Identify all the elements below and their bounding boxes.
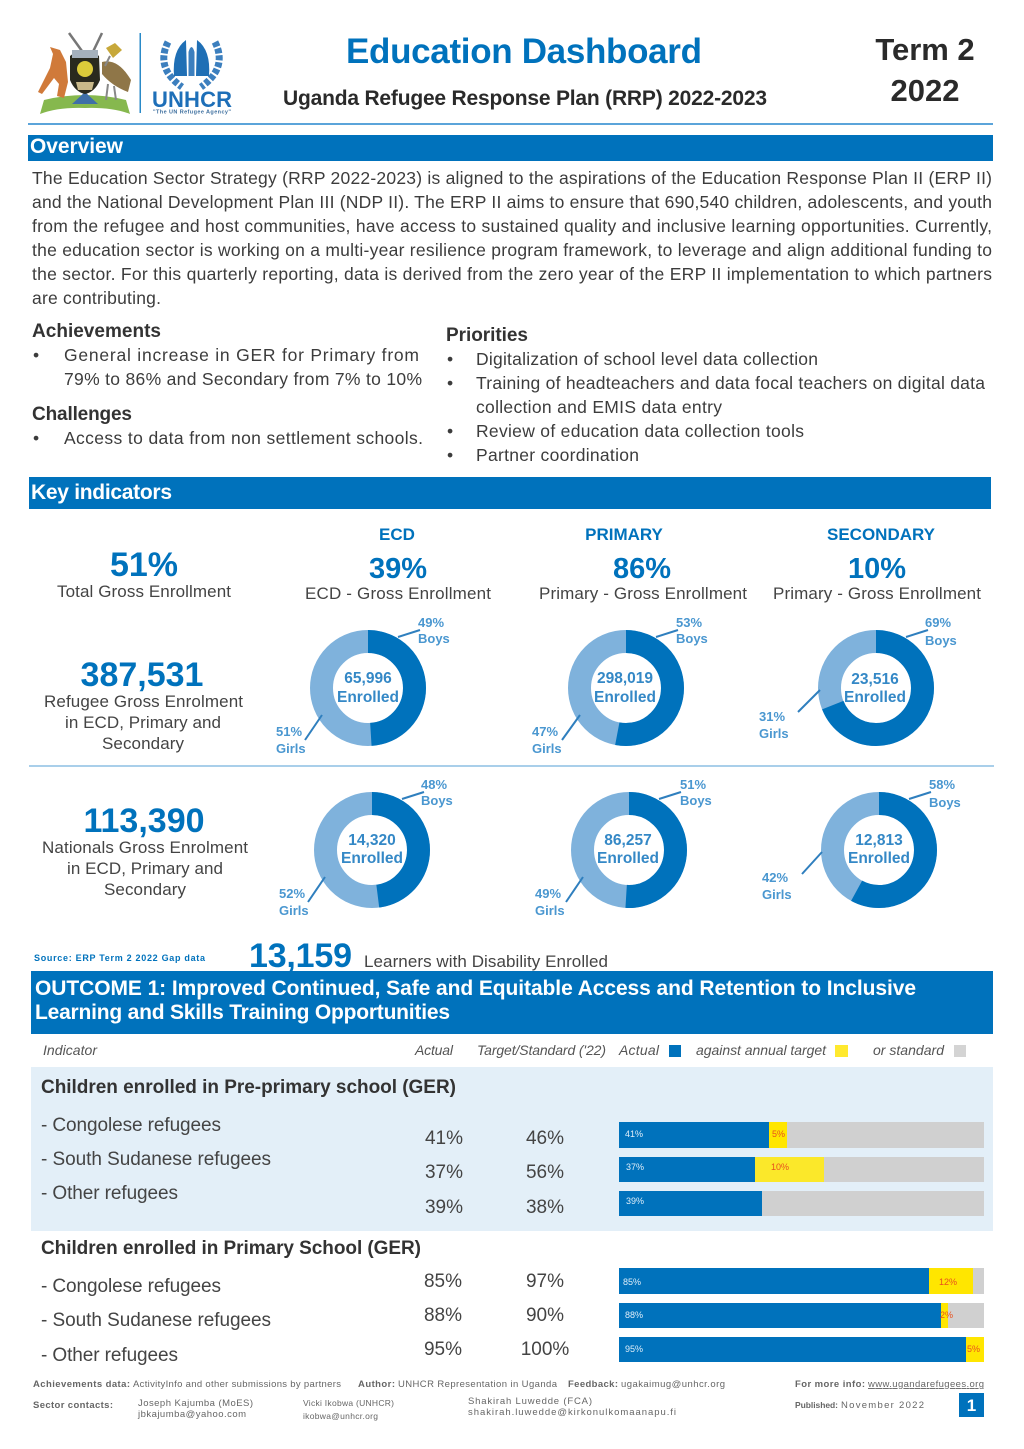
actual and target values: 97% bbox=[526, 1271, 564, 1292]
term label: Term 2 bbox=[875, 32, 975, 67]
donut chart: nationals secondary bbox=[762, 777, 961, 902]
donut chart: refugee primary: 298,019 bbox=[597, 670, 653, 687]
title: Education Dashboard bbox=[346, 32, 702, 71]
bar: other refugees pre-primary: 39% bbox=[626, 1196, 644, 1206]
achievements: 79% to 86% and Secondary from 7% to 10% bbox=[64, 369, 422, 389]
priorities: • bbox=[447, 373, 453, 393]
donut chart: nationals secondary: 58% bbox=[929, 777, 955, 792]
donut chart: refugee secondary: 69% bbox=[925, 615, 951, 630]
stat: nationals gross enrolment: Nationals Gross Enrolment bbox=[42, 838, 248, 857]
page number bbox=[959, 1393, 984, 1417]
header bbox=[38, 32, 975, 116]
stat: learners with disability bbox=[249, 937, 608, 975]
actual and target values: 85% bbox=[424, 1271, 462, 1292]
donut chart: nationals ECD: 14,320 bbox=[348, 832, 396, 849]
stat: ECD enrollment bbox=[305, 553, 491, 603]
overview text block: are contributing. bbox=[32, 288, 161, 308]
stat: ECD enrollment: 39% bbox=[369, 553, 427, 585]
priorities: Priorities bbox=[446, 325, 528, 346]
row labels: - Other refugees bbox=[41, 1183, 178, 1204]
donut chart: nationals ECD: Enrolled bbox=[341, 850, 403, 867]
heading: overview: Overview bbox=[30, 135, 124, 158]
bar: Congolese primary: 12% bbox=[939, 1277, 957, 1287]
donut chart: nationals ECD bbox=[279, 777, 453, 918]
donut chart: refugee primary: Girls bbox=[532, 741, 562, 756]
subtitle: Uganda Refugee Response Plan (RRP) 2022-2023 bbox=[283, 87, 767, 110]
icon: UNHCR logo: UNHCR bbox=[152, 87, 232, 112]
source note: Source: ERP Term 2 2022 Gap data bbox=[34, 953, 206, 963]
stat: nationals gross enrolment bbox=[42, 802, 248, 899]
page number: 1 bbox=[967, 1396, 976, 1415]
sector contacts: Joseph Kajumba (MoES) bbox=[138, 1398, 253, 1409]
column heading: primary: PRIMARY bbox=[585, 525, 664, 544]
donut chart: nationals primary: 49% bbox=[535, 886, 561, 901]
divider: logo separator bbox=[140, 33, 141, 113]
actual and target values: 37% bbox=[425, 1162, 463, 1183]
row labels bbox=[41, 1276, 271, 1366]
overview text block: the sector. For this quarterly reporting, data is derived from the zero year of the ERP II implementation to which partners bbox=[32, 264, 992, 284]
panel: key indicators bbox=[29, 477, 994, 975]
stat: ECD enrollment: ECD - Gross Enrollment bbox=[305, 584, 491, 603]
donut chart: refugee ECD: 49% bbox=[418, 615, 444, 630]
table header and legend: or standard bbox=[873, 1042, 945, 1058]
donut chart: refugee primary: 53% bbox=[676, 615, 702, 630]
priorities: • bbox=[447, 445, 453, 465]
stat: secondary enrollment: 10% bbox=[848, 553, 906, 585]
stat: secondary enrollment: Primary - Gross Enrollment bbox=[773, 584, 981, 603]
challenges bbox=[32, 404, 423, 448]
donut chart: nationals secondary: 42% bbox=[762, 870, 788, 885]
achievements: • bbox=[33, 345, 39, 365]
stat: total gross enrollment bbox=[57, 546, 231, 601]
panel: outcome 1 bbox=[31, 971, 993, 1366]
bar: other refugees pre-primary bbox=[619, 1191, 984, 1216]
actual and target values: 38% bbox=[526, 1197, 564, 1218]
donut chart: refugee secondary: 23,516 bbox=[851, 671, 899, 688]
sector contacts: shakirah.luwedde@kirkonulkomaanapu.fi bbox=[468, 1407, 676, 1418]
bar: Congolese pre-primary: 41% bbox=[625, 1129, 643, 1139]
donut chart: refugee ECD: 65,996 bbox=[344, 670, 392, 687]
donut chart: refugee primary: Boys bbox=[676, 631, 708, 646]
stat: primary enrollment bbox=[539, 553, 747, 603]
donut chart: refugee secondary: 31% bbox=[759, 709, 785, 724]
table header and legend bbox=[43, 1042, 966, 1058]
donut chart: refugee secondary bbox=[759, 615, 957, 741]
column heading: secondary: SECONDARY bbox=[827, 525, 936, 544]
table header and legend: Actual bbox=[618, 1042, 660, 1058]
actual and target values: 46% bbox=[526, 1128, 564, 1149]
heading: key indicators bbox=[29, 477, 991, 509]
published date: Published: bbox=[795, 1400, 838, 1410]
donut chart: refugee primary: Enrolled bbox=[594, 689, 656, 706]
term label bbox=[875, 32, 975, 108]
heading: overview bbox=[28, 135, 993, 161]
overview text block bbox=[32, 168, 992, 308]
table header and legend: against annual target bbox=[696, 1042, 827, 1058]
panel: pre-primary enrolment bbox=[31, 1067, 993, 1231]
term label: 2022 bbox=[891, 73, 959, 108]
data credits: www.ugandarefugees.org bbox=[867, 1379, 984, 1390]
donut chart: nationals secondary: Girls bbox=[762, 887, 792, 902]
sector contacts: ikobwa@unhcr.org bbox=[303, 1411, 378, 1421]
overview text block: the education sector is working on a multi-year resilience program framework, to leverage and align additional funding to bbox=[32, 240, 992, 260]
stat: nationals gross enrolment: in ECD, Primary and bbox=[67, 859, 223, 878]
donut chart: nationals primary: Boys bbox=[680, 793, 712, 808]
priorities bbox=[446, 325, 985, 465]
donut chart: refugee ECD: 51% bbox=[276, 724, 302, 739]
achievements bbox=[32, 321, 422, 389]
priorities: collection and EMIS data entry bbox=[476, 397, 722, 417]
donut chart: nationals primary: Enrolled bbox=[597, 850, 659, 867]
footer bbox=[33, 1379, 984, 1421]
priorities: Digitalization of school level data collection bbox=[476, 349, 818, 369]
donut chart: refugee ECD: Girls bbox=[276, 741, 306, 756]
data credits bbox=[33, 1379, 984, 1390]
sector contacts bbox=[33, 1396, 676, 1421]
table header and legend: Actual bbox=[414, 1042, 454, 1058]
bar: other refugees primary: 5% bbox=[967, 1344, 980, 1354]
sector contacts: Sector contacts: bbox=[33, 1400, 113, 1411]
achievements: General increase in GER for Primary from bbox=[64, 345, 419, 365]
data credits: Feedback: bbox=[568, 1379, 618, 1390]
priorities: Training of headteachers and data focal teachers on digital data bbox=[476, 373, 985, 393]
bar: South Sudanese pre-primary bbox=[619, 1157, 984, 1182]
overview text block: The Education Sector Strategy (RRP 2022-2023) is aligned to the aspirations of the Education Response Plan II (ERP II) bbox=[32, 168, 992, 188]
donut chart: nationals primary bbox=[535, 777, 712, 918]
donut chart: nationals ECD: Girls bbox=[279, 903, 309, 918]
donut chart: nationals ECD: Boys bbox=[421, 793, 453, 808]
donut chart: refugee primary bbox=[532, 615, 708, 756]
row labels: - Congolese refugees bbox=[41, 1115, 221, 1136]
heading: outcome 1: OUTCOME 1: Improved Continued, Safe and Equitable Access and Retention to Inclusive bbox=[35, 977, 916, 1000]
donut chart: nationals primary: 86,257 bbox=[604, 832, 652, 849]
stat: refugee gross enrolment: in ECD, Primary and bbox=[65, 713, 221, 732]
heading: primary: Children enrolled in Primary School (GER) bbox=[41, 1238, 421, 1259]
donut chart: refugee secondary: Boys bbox=[925, 633, 957, 648]
stat: primary enrollment: Primary - Gross Enrollment bbox=[539, 584, 747, 603]
bar: other refugees primary: 95% bbox=[625, 1344, 643, 1354]
row labels: - Congolese refugees bbox=[41, 1276, 221, 1297]
donut chart: refugee secondary: Girls bbox=[759, 726, 789, 741]
stat: refugee gross enrolment bbox=[44, 656, 243, 753]
donut chart: nationals ECD: 52% bbox=[279, 886, 305, 901]
row labels: - Other refugees bbox=[41, 1345, 178, 1366]
bar: South Sudanese pre-primary: 37% bbox=[626, 1162, 644, 1172]
donut chart: refugee secondary: Enrolled bbox=[844, 689, 906, 706]
heading: pre-primary: Children enrolled in Pre-primary school (GER) bbox=[41, 1077, 456, 1098]
table header and legend: Target/Standard ('22) bbox=[477, 1042, 606, 1058]
bar: Congolese pre-primary bbox=[619, 1122, 984, 1148]
donut chart: nationals ECD: 48% bbox=[421, 777, 447, 792]
actual and target values: 88% bbox=[424, 1305, 462, 1326]
row labels bbox=[41, 1115, 271, 1204]
bar: Congolese primary: 85% bbox=[623, 1277, 641, 1287]
stat: refugee gross enrolment: Refugee Gross Enrolment bbox=[44, 692, 243, 711]
actual and target values bbox=[425, 1128, 564, 1218]
actual and target values: 41% bbox=[425, 1128, 463, 1149]
priorities: • bbox=[447, 349, 453, 369]
panel: primary enrolment bbox=[41, 1238, 984, 1366]
challenges: Challenges bbox=[32, 404, 132, 425]
donut chart: nationals secondary: Boys bbox=[929, 795, 961, 810]
data credits: ugakaimug@unhcr.org bbox=[621, 1379, 725, 1390]
stat: nationals gross enrolment: Secondary bbox=[104, 880, 186, 899]
table header and legend: Indicator bbox=[43, 1042, 98, 1058]
bar: South Sudanese pre-primary: 10% bbox=[771, 1162, 789, 1172]
priorities: Review of education data collection tools bbox=[476, 421, 804, 441]
bar: Congolese primary bbox=[619, 1268, 984, 1294]
row labels: - South Sudanese refugees bbox=[41, 1149, 271, 1170]
overview text block: and the National Development Plan III (NDP II). The ERP II aims to ensure that 690,540 children, adolescents, and youth bbox=[32, 192, 992, 212]
challenges: • bbox=[33, 428, 39, 448]
stat: learners with disability: 13,159 bbox=[249, 937, 352, 975]
donut chart: nationals primary: 51% bbox=[680, 777, 706, 792]
stat: total gross enrollment: Total Gross Enrollment bbox=[57, 582, 231, 601]
achievements: Achievements bbox=[32, 321, 161, 342]
stat: total gross enrollment: 51% bbox=[110, 546, 178, 584]
actual and target values: 39% bbox=[425, 1197, 463, 1218]
actual and target values: 100% bbox=[521, 1339, 569, 1360]
stat: refugee gross enrolment: 387,531 bbox=[81, 656, 203, 694]
stat: secondary enrollment bbox=[773, 553, 981, 603]
bar: South Sudanese primary: 88% bbox=[625, 1310, 643, 1320]
challenges: Access to data from non settlement schools. bbox=[64, 428, 423, 448]
data credits: Author: bbox=[358, 1379, 395, 1390]
overview text block: from the refugee and host communities, have access to sustained quality and inclusive learning opportunities. Currently, bbox=[32, 216, 992, 236]
bar: South Sudanese primary bbox=[619, 1303, 984, 1328]
published date bbox=[795, 1400, 924, 1411]
sector contacts: Vicki Ikobwa (UNHCR) bbox=[303, 1398, 394, 1408]
panel: overview bbox=[28, 135, 993, 465]
stat: learners with disability: Learners with Disability Enrolled bbox=[364, 952, 608, 971]
icon: UNHCR logo: "The UN Refugee Agency" bbox=[153, 110, 231, 116]
actual and target values: 95% bbox=[424, 1339, 462, 1360]
heading: outcome 1 bbox=[31, 971, 993, 1034]
icon: Uganda coat of arms bbox=[38, 33, 131, 114]
donut chart: nationals primary: Girls bbox=[535, 903, 565, 918]
priorities: • bbox=[447, 421, 453, 441]
data credits: ActivityInfo and other submissions by partners bbox=[133, 1379, 341, 1390]
bar: South Sudanese primary: 2% bbox=[940, 1310, 953, 1320]
sector contacts: Shakirah Luwedde (FCA) bbox=[468, 1396, 592, 1407]
donut chart: nationals secondary: Enrolled bbox=[848, 850, 910, 867]
stat: nationals gross enrolment: 113,390 bbox=[83, 802, 205, 840]
actual and target values: 56% bbox=[526, 1162, 564, 1183]
actual and target values: 90% bbox=[526, 1305, 564, 1326]
bar: other refugees primary bbox=[619, 1337, 984, 1362]
donut chart: nationals secondary: 12,813 bbox=[855, 832, 903, 849]
bar: Congolese pre-primary: 5% bbox=[772, 1129, 785, 1139]
heading: key indicators: Key indicators bbox=[31, 481, 172, 504]
sector contacts: jbkajumba@yahoo.com bbox=[137, 1409, 246, 1420]
row labels: - South Sudanese refugees bbox=[41, 1310, 271, 1331]
donut chart: refugee ECD: Enrolled bbox=[337, 689, 399, 706]
published date: November 2022 bbox=[841, 1400, 924, 1411]
icon: UNHCR logo bbox=[152, 40, 232, 116]
donut chart: refugee ECD: Boys bbox=[418, 631, 450, 646]
donut chart: refugee primary: 47% bbox=[532, 724, 558, 739]
data credits: For more info: bbox=[795, 1379, 865, 1390]
stat: primary enrollment: 86% bbox=[613, 553, 671, 585]
actual and target values bbox=[424, 1271, 569, 1360]
stat: refugee gross enrolment: Secondary bbox=[102, 734, 184, 753]
data credits: Achievements data: bbox=[33, 1379, 130, 1390]
heading: outcome 1: Learning and Skills Training Opportunities bbox=[35, 1001, 450, 1024]
column heading: ECD: ECD bbox=[379, 525, 415, 544]
data credits: UNHCR Representation in Uganda bbox=[398, 1379, 558, 1390]
donut chart: refugee ECD bbox=[276, 615, 450, 756]
priorities: Partner coordination bbox=[476, 445, 639, 465]
